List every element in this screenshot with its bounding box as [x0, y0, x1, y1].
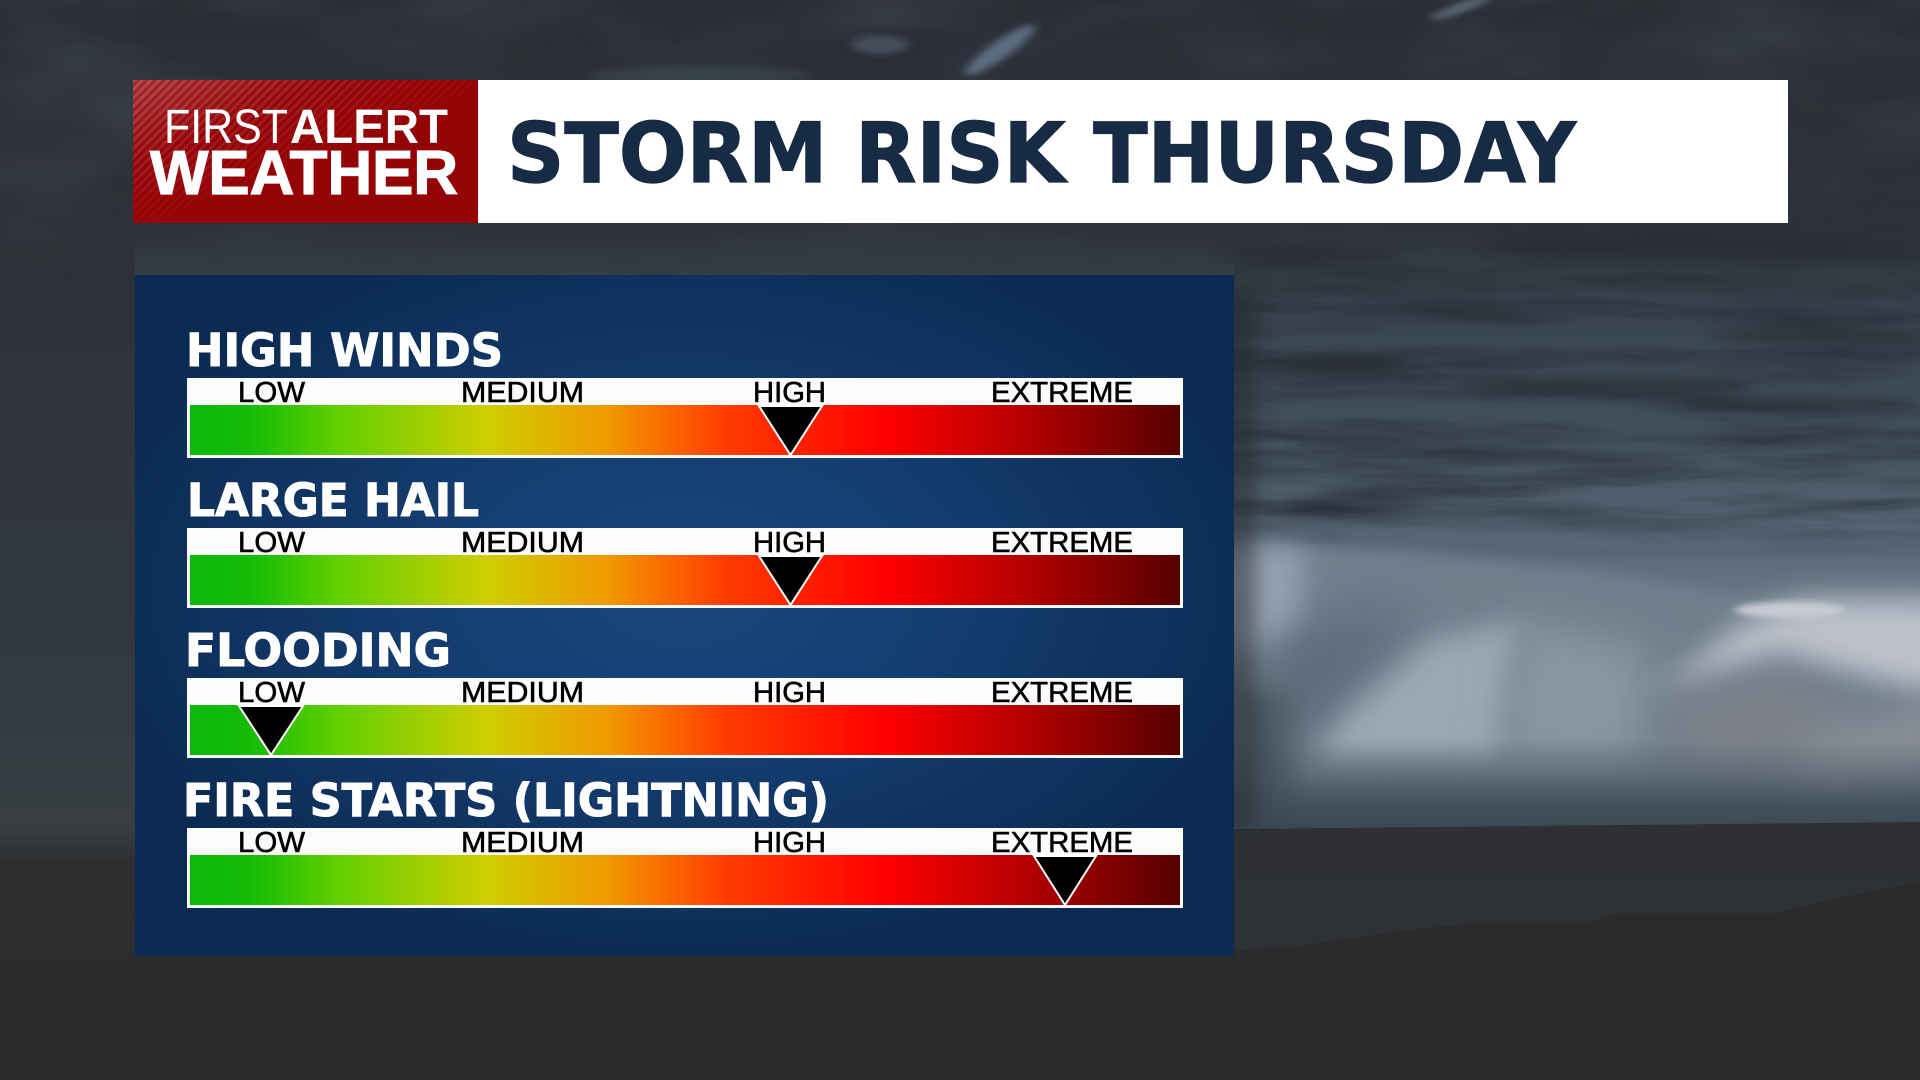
scale bar: EXTREME: [991, 377, 1133, 409]
scale bar: EXTREME: [991, 677, 1133, 709]
scale bar: MEDIUM: [461, 677, 584, 709]
ground: [1234, 822, 1920, 1080]
scale bar: HIGH: [753, 677, 826, 709]
logo: First Alert Weather: FIRST: [164, 101, 288, 154]
header bar: [133, 80, 1788, 223]
panel: risk gauges: [135, 275, 1234, 956]
heading: LARGE HAIL: [187, 474, 479, 527]
panel shadow: [1210, 290, 1256, 830]
gauge: large hail: [187, 474, 1183, 608]
logo: First Alert Weather: [133, 80, 478, 223]
logo: First Alert Weather: WEATHER: [150, 139, 458, 208]
scale bar: LOW: [238, 677, 306, 709]
bright and dark rain shafts: [1200, 545, 1920, 835]
wispy clouds at top: [590, 0, 1492, 83]
scale bar: EXTREME: [991, 827, 1133, 859]
logo: First Alert Weather: ALERT: [290, 101, 448, 154]
distant ridge: [1234, 882, 1920, 1080]
gauge: flooding: [185, 624, 1183, 758]
scale bar: HIGH: [753, 527, 826, 559]
title strip: [478, 80, 1788, 223]
scale bar: LOW: [238, 527, 306, 559]
scale bar: [187, 677, 1183, 758]
scale bar: MEDIUM: [461, 377, 584, 409]
heading: HIGH WINDS: [186, 324, 503, 377]
dark cloud bands: [1220, 233, 1920, 472]
gauge: high winds: [186, 324, 1183, 458]
heading: FIRE STARTS (LIGHTNING): [183, 774, 829, 827]
scale bar: [187, 377, 1183, 458]
pointer: high: [759, 556, 822, 605]
scale bar: LOW: [238, 827, 306, 859]
scale bar: HIGH: [753, 377, 826, 409]
scale bar: MEDIUM: [461, 827, 584, 859]
scale bar: [187, 527, 1183, 608]
rain curtain: [1234, 540, 1920, 790]
left column of sky: [0, 0, 135, 1080]
scale bar: MEDIUM: [461, 527, 584, 559]
heading: FLOODING: [185, 624, 451, 677]
mottled upper sky: [0, 0, 1920, 187]
scale bar: HIGH: [753, 827, 826, 859]
pointer: high: [759, 406, 822, 455]
scale bar: EXTREME: [991, 527, 1133, 559]
gauge: fire starts: [183, 774, 1183, 908]
cloud streaks: [1234, 275, 1920, 551]
pointer: low: [239, 706, 303, 755]
scale bar: [187, 827, 1183, 908]
title: STORM RISK THURSDAY: [507, 105, 1577, 202]
scale bar: LOW: [238, 377, 306, 409]
pointer: extreme: [1034, 856, 1096, 905]
haze above the horizon: [1234, 740, 1920, 835]
